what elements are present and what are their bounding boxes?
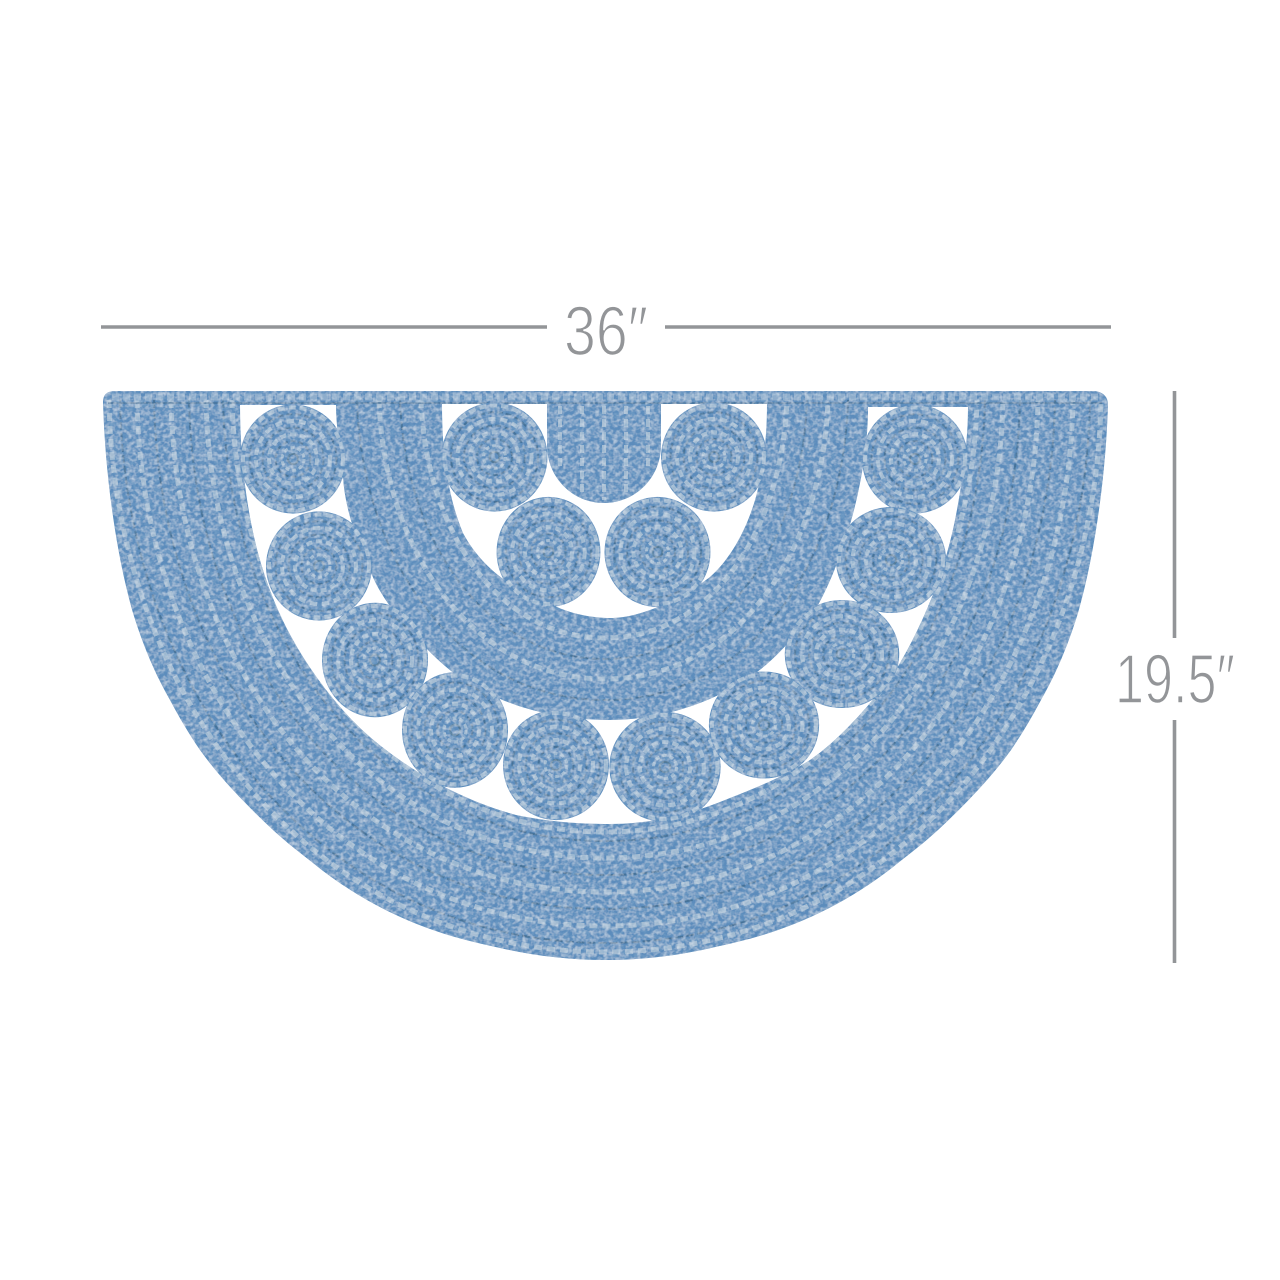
coiled circle 2 (442, 402, 548, 512)
width dimension: 36 inches: 36″ (564, 292, 648, 370)
coiled circle 14 (709, 671, 819, 779)
coiled circle 5 (266, 511, 372, 621)
coiled circle 1 (240, 404, 346, 514)
half-round braided rug (103, 391, 1108, 960)
top edge rope (108, 397, 1102, 403)
coiled circle 3 (661, 402, 767, 512)
coiled circle 6 (497, 497, 600, 607)
coiled circle 7 (604, 497, 710, 607)
height dimension: 19.5 inches: 19.5″ (1115, 640, 1235, 718)
coiled circle 10 (785, 600, 899, 708)
rug body with cut-out openings (103, 391, 1108, 960)
coiled circle 4 (862, 404, 968, 514)
coiled circle 11 (402, 672, 508, 788)
top centre strip (547, 400, 661, 503)
braided rows in the bands (109, 400, 1101, 952)
coiled circle 9 (322, 603, 428, 717)
coiled circle 8 (836, 507, 946, 613)
coiled circle 13 (609, 712, 721, 822)
coiled circle 12 (503, 710, 609, 820)
